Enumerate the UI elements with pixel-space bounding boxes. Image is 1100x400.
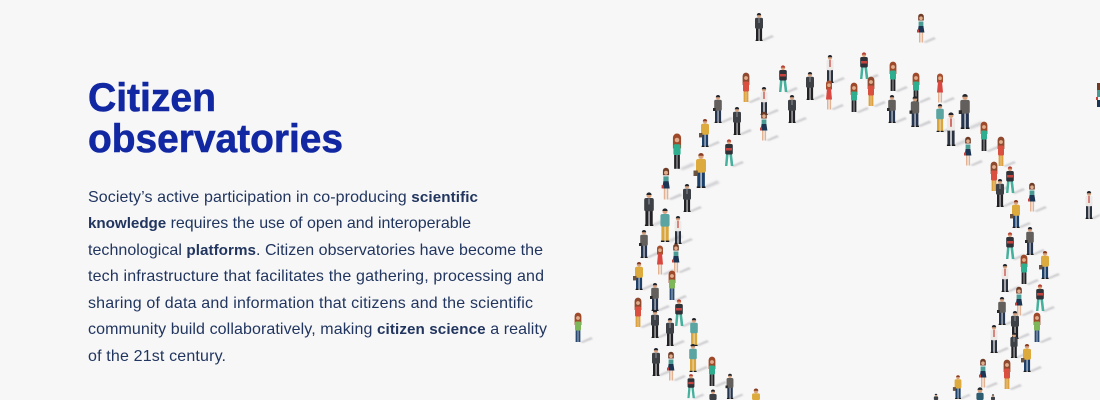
- people: right arc: [934, 122, 1060, 400]
- title: Citizen: [88, 76, 216, 120]
- illustration: ring of people: [575, 13, 1100, 400]
- people: left arc: [633, 119, 760, 400]
- body paragraph: Society’s active participation in co-producing scientific: [88, 189, 478, 206]
- people: outliers: [575, 83, 1100, 343]
- title: [88, 76, 343, 161]
- people: top arc: [713, 13, 984, 146]
- body paragraph: of the 21st century.: [88, 348, 226, 365]
- body paragraph: [88, 189, 547, 365]
- body paragraph: tech infrastructure that facilitates the gathering, processing and: [88, 268, 544, 285]
- title: observatories: [88, 117, 343, 161]
- body paragraph: sharing of data and information that citizens and the scientific: [88, 295, 533, 312]
- body paragraph: technological platforms. Citizen observatories have become the: [88, 242, 543, 259]
- body paragraph: knowledge requires the use of open and interoperable: [88, 215, 471, 232]
- body paragraph: community build collaboratively, making citizen science a reality: [88, 321, 547, 338]
